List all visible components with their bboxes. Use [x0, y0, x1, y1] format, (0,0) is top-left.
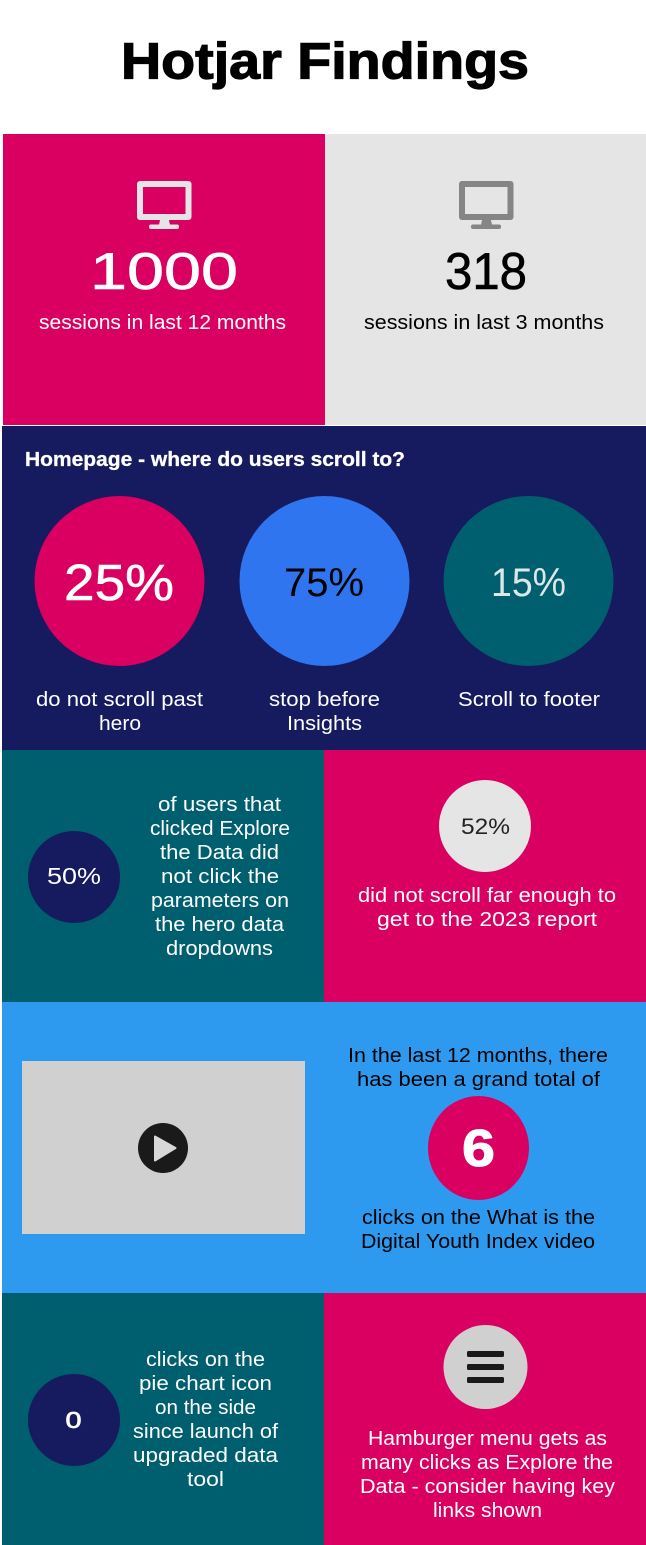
text: hamburger finding: many clicks as Explore the — [361, 1452, 613, 1474]
text: pie chart finding: pie chart icon — [139, 1373, 272, 1395]
text: pie chart finding: on the side — [155, 1397, 256, 1419]
text: video clicks: clicks on the What is the — [362, 1207, 595, 1229]
panel: video clicks — [2, 1002, 646, 1293]
label: stop before insights: Insights — [287, 713, 362, 735]
stat: 6 clicks: 6 — [462, 1120, 495, 1178]
panel: 2023 report — [324, 750, 646, 1002]
text: 2023 report finding: did not scroll far enough to — [358, 885, 616, 907]
stat: 52% — [439, 780, 531, 872]
label: stop before insights — [269, 689, 380, 735]
text: hamburger finding: Data - consider having key — [360, 1476, 615, 1498]
text: video intro: has been a grand total of — [357, 1069, 600, 1091]
text: pie chart finding: since launch of — [133, 1421, 278, 1443]
text: explore the data finding: dropdowns — [166, 938, 273, 960]
label: do not scroll past hero — [36, 689, 203, 735]
icon: monitor grey — [459, 181, 514, 229]
stat: 50%: 50% — [47, 863, 101, 889]
stat: 75%: 75% — [284, 561, 364, 605]
stat: 0 clicks: 0 — [66, 1407, 82, 1433]
stat: 6 clicks — [428, 1096, 529, 1200]
stat: 75% — [240, 496, 410, 666]
text: hamburger finding: links shown — [433, 1500, 542, 1522]
text: pie chart finding: upgraded data — [133, 1445, 279, 1467]
text: explore the data finding: the hero data — [155, 914, 285, 936]
label: stop before insights: stop before — [269, 689, 380, 711]
panel: explore the data — [2, 750, 324, 1002]
text: explore the data finding: the Data did — [160, 842, 279, 864]
panel: 1000 sessions — [3, 134, 325, 425]
text: hamburger finding — [360, 1428, 615, 1522]
caption: sessions in last 3 months: sessions in last 3 months — [364, 312, 604, 334]
text: video intro — [348, 1045, 608, 1091]
stat: 52%: 52% — [461, 814, 510, 839]
text: explore the data finding: not click the — [161, 866, 279, 888]
number: 318: 318 — [445, 243, 527, 301]
text: explore the data finding: of users that — [158, 794, 281, 816]
number: 1000: 1000 — [90, 243, 238, 301]
stat: 0 clicks — [28, 1374, 120, 1466]
text: explore the data finding — [150, 794, 290, 960]
icon: monitor light — [137, 181, 192, 229]
panel: homepage scroll — [2, 426, 646, 750]
text: explore the data finding: clicked Explore — [150, 818, 290, 840]
text: 2023 report finding: get to the 2023 report — [377, 909, 598, 931]
panel: hamburger menu — [324, 1293, 646, 1545]
label: do not scroll past hero: hero — [99, 713, 141, 735]
stat: 50% — [28, 831, 120, 923]
text: video clicks: Digital Youth Index video — [361, 1231, 595, 1253]
stat: 25% — [34, 496, 204, 666]
text: 2023 report finding — [358, 885, 616, 931]
stat: 15%: 15% — [491, 561, 566, 605]
label: scroll to footer: Scroll to footer — [458, 689, 600, 711]
text: video clicks — [361, 1207, 595, 1253]
icon: hamburger — [444, 1325, 528, 1409]
text: video intro: In the last 12 months, there — [348, 1045, 608, 1067]
heading: homepage scroll: Homepage - where do users scroll to? — [25, 449, 405, 471]
stat: 25%: 25% — [64, 554, 174, 611]
text: hamburger finding: Hamburger menu gets as — [368, 1428, 607, 1450]
text: explore the data finding: parameters on — [151, 890, 289, 912]
icon: play — [138, 1123, 188, 1173]
panel: pie chart icon — [2, 1293, 324, 1545]
text: pie chart finding: tool — [187, 1469, 224, 1491]
label: do not scroll past hero: do not scroll past — [36, 689, 203, 711]
text: pie chart finding: clicks on the — [146, 1349, 265, 1371]
stat: 15% — [444, 496, 614, 666]
panel: 318 sessions — [325, 134, 646, 425]
title: Hotjar Findings — [121, 32, 529, 90]
video placeholder — [22, 1061, 305, 1234]
caption: sessions in last 12 months: sessions in last 12 months — [39, 312, 286, 334]
text: pie chart finding — [133, 1349, 279, 1491]
